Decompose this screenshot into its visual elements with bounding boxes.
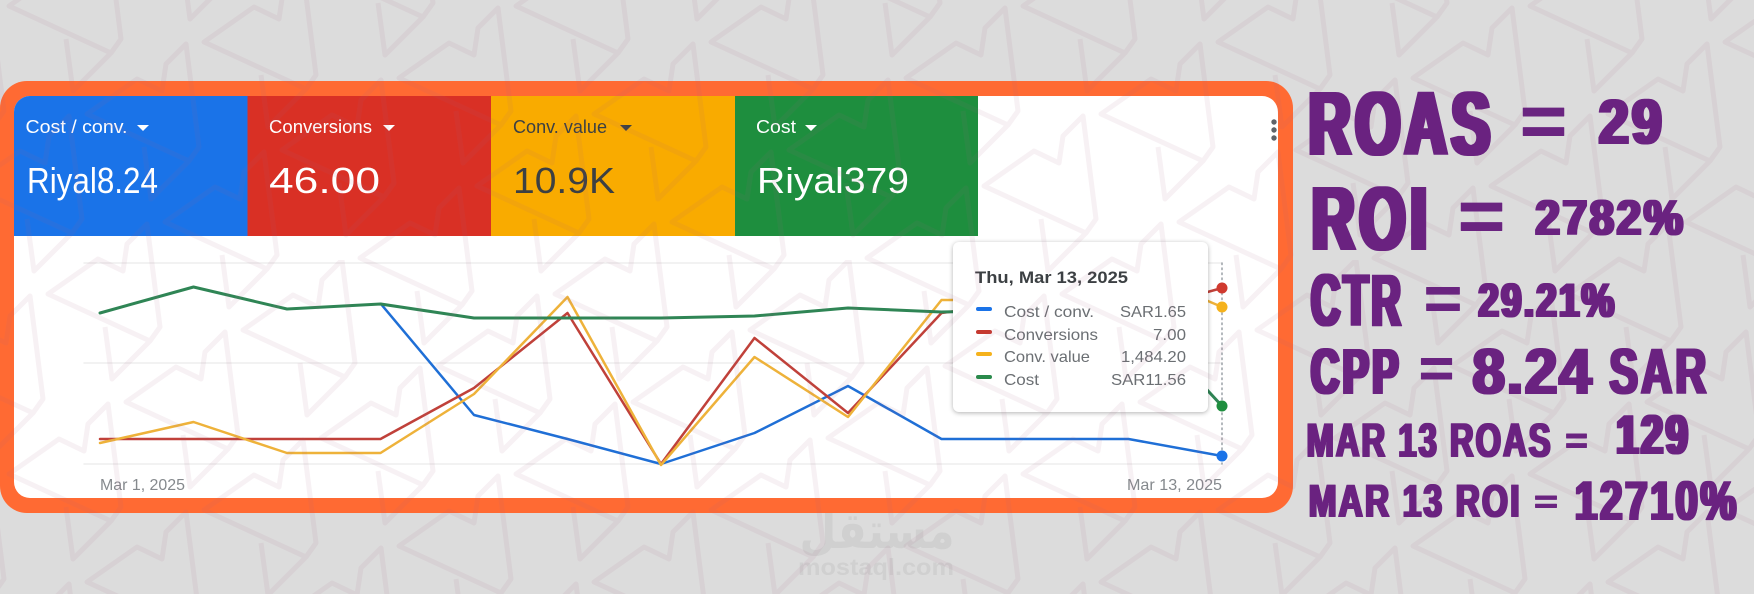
tile: conversions [248,96,491,236]
metric: ROAS: ROAS [1309,74,1495,174]
tooltip: Conv. value [1004,349,1090,366]
metric: ROI: ROI [1312,170,1432,270]
tooltip: Cost / conv. [1004,304,1094,321]
metric: ROAS: = [1520,81,1567,162]
metric: CTR: 29.21% [1478,274,1616,326]
axis date end: Mar 13, 2025 [1127,477,1222,494]
metric: CTR: CTR [1311,260,1404,342]
tile: cost per conversion [14,96,248,236]
tooltip: SAR1.65 [1120,304,1186,321]
watermark: mostaql: mostaql.com [798,554,954,580]
metric: CTR [1311,260,1616,342]
metric: Mar 13 ROI: = [1534,484,1558,519]
watermark: mostaql [798,502,954,580]
tooltip: 7.00 [1153,327,1186,344]
tile: cost: Riyal379 [757,160,909,201]
tile: cost: Cost [756,117,796,137]
metric: Mar 13 ROI: MAR 13 ROI [1309,476,1522,526]
tooltip: 1,484.20 [1121,349,1186,366]
tile: conversion value: 10.9K [513,160,615,201]
metrics list [1307,74,1739,532]
tile: cost [735,96,978,236]
chart end markers [1216,282,1228,462]
metric: Mar 13 ROAS: 129 [1616,404,1690,466]
tile: conversions: 46.00 [269,160,380,201]
watermark: mostaql: مستقل [800,502,954,560]
tooltip: Thu, Mar 13, 2025 [975,268,1128,287]
tooltip: Cost [1004,372,1040,389]
metric: CPP [1311,336,1710,408]
metric: Mar 13 ROAS: = [1565,420,1588,461]
metric: ROI: = [1458,176,1505,257]
metric: Mar 13 ROAS: MAR 13 ROAS [1307,414,1553,466]
tooltip: Conversions [1004,327,1098,344]
metric: CPP: CPP [1311,336,1402,408]
metric: CPP: 8.24 [1472,336,1594,408]
tile: conversion value [491,96,735,236]
panel: dashboard frame [0,81,1293,513]
tooltip [953,242,1208,412]
metric: Mar 13 ROI [1309,470,1739,532]
metric: ROI: 2782% [1536,192,1686,246]
tooltip: SAR11.56 [1111,372,1186,389]
icon: more menu [1271,119,1277,141]
tile: conversions: Conversions [269,117,372,137]
tile: cost per conversion: Riyal8.24 [27,160,158,201]
metric: CPP: = [1419,338,1454,399]
tile: conversion value: Conv. value [513,117,607,137]
line chart [84,263,1222,465]
metric tiles [14,96,978,236]
axis date start: Mar 1, 2025 [100,477,185,494]
metric: CTR: = [1424,265,1462,332]
metric: ROAS: 29 [1599,88,1665,158]
tile: cost per conversion: Cost / conv. [26,117,128,137]
metric: ROI [1312,170,1686,270]
